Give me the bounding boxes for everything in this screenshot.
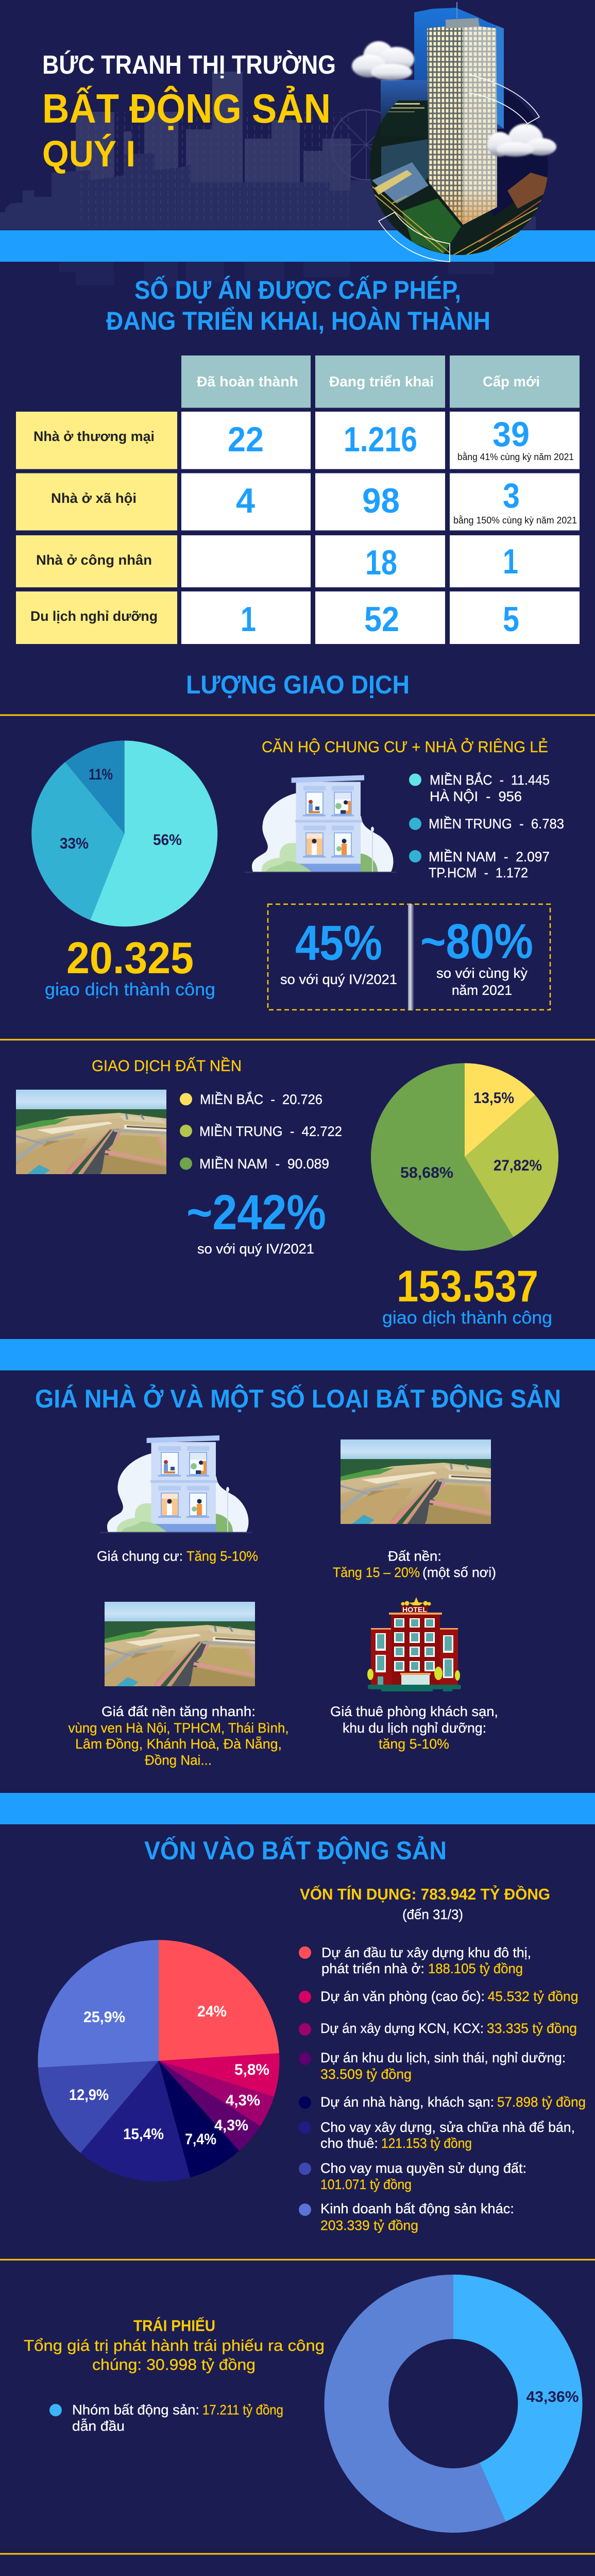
skyline reflection xyxy=(59,262,495,287)
text: land price regions: vùng ven Hà Nội, TPHCM, Thái Bình, xyxy=(68,1720,288,1736)
white outline arcs xyxy=(379,75,539,262)
text: land price regions: Lâm Đồng, Khánh Hoà, Đà Nẵng, xyxy=(75,1736,282,1752)
title: QUÝ I xyxy=(42,134,135,175)
legend: apartments: MIỀN NAM - 2.097 xyxy=(429,849,550,865)
row: nhà ở xã hội: 3 xyxy=(503,476,520,515)
cloud right xyxy=(487,124,556,157)
pie chart: credit: 5,8% xyxy=(234,2061,269,2078)
callout: comparison box: so với quý IV/2021 xyxy=(280,972,397,987)
title: BỨC TRANH THỊ TRƯỜNG xyxy=(42,50,336,79)
table header: Đang triển khai xyxy=(329,374,434,389)
row: du lịch nghỉ dưỡng: 1 xyxy=(241,600,256,639)
text: apartment price: Tăng 5-10% xyxy=(186,1549,258,1564)
total land xyxy=(382,1262,552,1328)
heading: capital: VỐN VÀO BẤT ĐỘNG SẢN xyxy=(144,1836,447,1865)
legend: credit: 121.153 tỷ đồng xyxy=(381,2136,472,2151)
blue band xyxy=(0,1793,595,1824)
row: du lịch nghỉ dưỡng: Du lịch nghỉ dưỡng xyxy=(30,608,158,624)
pie chart: land by region: 58,68% xyxy=(400,1164,453,1181)
pie chart: land by region: 27,82% xyxy=(494,1157,542,1174)
legend: credit: cho thuê: xyxy=(320,2136,378,2151)
credit heading: VỐN TÍN DỤNG: 783.942 TỶ ĐỒNG xyxy=(300,1885,550,1903)
donut chart: bonds xyxy=(324,2275,582,2533)
heading: prices: GIÁ NHÀ Ở VÀ MỘT SỐ LOẠI BẤT ĐỘNG SẢN xyxy=(35,1384,561,1413)
legend: land: MIỀN TRUNG - 42.722 xyxy=(199,1123,342,1139)
pie chart: apartments by region xyxy=(31,740,217,927)
legend: credit: Cho vay mua quyền sử dụng đất: xyxy=(320,2161,526,2176)
legend: credit: 188.105 tỷ đồng xyxy=(428,1961,523,1976)
legend: credit: Dự án đầu tư xây dựng khu đô thị, xyxy=(321,1945,531,1960)
legend: credit: Dự án văn phòng (cao ốc): xyxy=(320,1989,485,2004)
pie chart: credit: 4,3% xyxy=(214,2117,248,2134)
legend: land: MIỀN BẮC - 20.726 xyxy=(200,1091,322,1107)
row: nhà ở thương mại: bằng 41% cùng kỳ năm 2021 xyxy=(457,451,574,462)
credit heading: (đến 31/3) xyxy=(402,1907,463,1922)
table header: Cấp mới xyxy=(483,374,540,389)
callout: comparison box: ~80% xyxy=(420,914,533,969)
row: nhà ở xã hội: Nhà ở xã hội xyxy=(51,490,137,506)
legend: credit: 57.898 tỷ đồng xyxy=(497,2094,586,2110)
row: nhà ở thương mại: 1.216 xyxy=(344,420,417,459)
row: nhà ở xã hội xyxy=(16,473,580,531)
table header xyxy=(181,355,580,408)
pie chart: credit: 25,9% xyxy=(83,2009,125,2026)
text: bonds: 17.211 tỷ đồng xyxy=(202,2402,283,2417)
pie chart: credit: 24% xyxy=(197,2003,227,2020)
heading: project counts: ĐANG TRIỂN KHAI, HOÀN THÀNH xyxy=(106,307,490,335)
row: du lịch nghỉ dưỡng xyxy=(16,591,580,644)
donut chart: bonds: 43,36% xyxy=(526,2388,579,2405)
legend: land xyxy=(180,1091,342,1172)
total apartments: 20.325 xyxy=(66,934,194,983)
callout: comparison box xyxy=(268,904,550,1010)
legend: land: MIỀN NAM - 90.089 xyxy=(199,1156,329,1172)
icon: hotel xyxy=(367,1597,461,1691)
text: land price: Tăng 15 – 20% xyxy=(333,1565,420,1580)
row: nhà ở công nhân: 18 xyxy=(365,543,397,582)
text: bonds: Nhóm bất động sản: xyxy=(72,2402,199,2417)
hero header xyxy=(0,2,595,287)
heading: project counts: SỐ DỰ ÁN ĐƯỢC CẤP PHÉP, xyxy=(134,275,461,304)
pie chart: apartments by region: 11% xyxy=(89,766,113,783)
legend: credit: Dự án xây dựng KCN, KCX: xyxy=(320,2021,484,2036)
row: nhà ở xã hội: bằng 150% cùng kỳ năm 2021 xyxy=(453,515,577,526)
pie chart: credit: 7,4% xyxy=(185,2131,216,2148)
text: land price xyxy=(333,1549,496,1580)
photo: land plots xyxy=(341,1439,491,1524)
photo: land plots xyxy=(16,1090,166,1174)
callout: comparison box: so với cùng kỳ xyxy=(436,965,528,981)
text: bonds: chúng: 30.998 tỷ đồng xyxy=(92,2355,256,2374)
row: du lịch nghỉ dưỡng: 52 xyxy=(364,600,399,639)
title xyxy=(42,50,336,175)
icon: apartment building xyxy=(245,775,397,873)
text: apartment price xyxy=(97,1549,258,1564)
row: nhà ở thương mại: Nhà ở thương mại xyxy=(33,429,155,444)
callout: comparison box: năm 2021 xyxy=(452,982,512,998)
blue band xyxy=(0,230,595,262)
tower image xyxy=(352,2,556,262)
pie chart: apartments by region: 33% xyxy=(60,835,89,852)
text: land price regions: Đồng Nai... xyxy=(145,1753,212,1768)
row: nhà ở công nhân xyxy=(16,535,580,587)
legend: apartments: MIỀN TRUNG - 6.783 xyxy=(429,816,564,832)
blue band xyxy=(0,1339,595,1370)
title: BẤT ĐỘNG SẢN xyxy=(42,86,331,131)
row: du lịch nghỉ dưỡng: 5 xyxy=(503,600,519,639)
text: land price: Đất nền: xyxy=(388,1549,441,1564)
text: bonds: Tổng giá trị phát hành trái phiếu ra công xyxy=(24,2336,325,2354)
heading: project counts xyxy=(106,275,490,335)
text: bonds xyxy=(24,2316,325,2434)
land heading: GIAO DỊCH ĐẤT NỀN xyxy=(92,1057,242,1075)
text: bonds: TRÁI PHIẾU xyxy=(133,2316,215,2335)
legend: credit: Kinh doanh bất động sản khác: xyxy=(320,2201,514,2216)
legend: credit: phát triển nhà ở: xyxy=(321,1961,424,1976)
legend: credit: 45.532 tỷ đồng xyxy=(487,1989,578,2004)
pie chart: credit: 12,9% xyxy=(69,2087,109,2104)
row: nhà ở công nhân: Nhà ở công nhân xyxy=(36,552,152,568)
text: apartment price: Giá chung cư: xyxy=(97,1549,183,1564)
row: nhà ở thương mại: 39 xyxy=(492,415,530,454)
text: hotel prices: tăng 5-10% xyxy=(379,1736,449,1752)
pie chart: land by region: 13,5% xyxy=(473,1090,514,1107)
pie chart: apartments by region: 56% xyxy=(153,832,182,849)
callout: comparison box: 45% xyxy=(295,916,382,971)
legend: credit: 203.339 tỷ đồng xyxy=(320,2217,418,2233)
legend: apartments: TP.HCM - 1.172 xyxy=(429,865,528,880)
icon: hotel: HOTEL xyxy=(402,1605,427,1614)
legend: credit xyxy=(299,1945,586,2233)
legend: apartments xyxy=(409,772,564,880)
icon: apartment building xyxy=(100,1435,252,1533)
pie chart: credit: 15,4% xyxy=(123,2126,164,2143)
row: nhà ở thương mại xyxy=(16,412,580,469)
apartments heading: CĂN HỘ CHUNG CƯ + NHÀ Ở RIÊNG LẺ xyxy=(262,737,548,756)
table header: Đã hoàn thành xyxy=(197,374,298,389)
text: hotel prices xyxy=(330,1704,498,1752)
total land: giao dịch thành công xyxy=(382,1308,552,1328)
legend: credit: 101.071 tỷ đồng xyxy=(320,2177,412,2192)
project table xyxy=(16,355,580,644)
legend: credit: 33.335 tỷ đồng xyxy=(487,2021,577,2036)
text: land price regions xyxy=(68,1704,288,1768)
text: land price regions: Giá đất nền tăng nhanh: xyxy=(101,1704,256,1719)
text: hotel prices: Giá thuê phòng khách sạn, xyxy=(330,1704,498,1719)
legend: apartments: MIỀN BẮC - 11.445 xyxy=(430,772,550,788)
callout: land growth: ~242% xyxy=(186,1185,326,1240)
legend: apartments: HÀ NỘI - 956 xyxy=(430,788,522,804)
legend: credit: 33.509 tỷ đồng xyxy=(320,2066,412,2082)
callout: land growth: so với quý IV/2021 xyxy=(197,1241,314,1257)
pie chart: credit xyxy=(38,1940,279,2182)
photo: land plots xyxy=(105,1602,255,1686)
total land: 153.537 xyxy=(397,1262,538,1311)
credit heading xyxy=(300,1885,550,1922)
legend: credit: Dự án nhà hàng, khách sạn: xyxy=(320,2094,494,2110)
cloud left xyxy=(352,41,414,80)
text: hotel prices: khu du lịch nghỉ dưỡng: xyxy=(343,1720,486,1736)
pie chart: land by region xyxy=(371,1063,558,1251)
heading: lượng giao dịch: LƯỢNG GIAO DỊCH xyxy=(186,670,410,699)
total apartments: giao dịch thành công xyxy=(45,980,215,999)
city skyline silhouette xyxy=(0,72,536,230)
pie chart: credit: 4,3% xyxy=(226,2092,260,2109)
text: land price: (một số nơi) xyxy=(422,1565,496,1580)
row: nhà ở xã hội: 98 xyxy=(362,481,400,520)
row: nhà ở thương mại: 22 xyxy=(228,420,264,459)
total apartments xyxy=(45,934,215,999)
row: nhà ở công nhân: 1 xyxy=(503,542,518,581)
row: nhà ở xã hội: 4 xyxy=(236,481,255,520)
legend: credit: Cho vay xây dựng, sửa chữa nhà để bán, xyxy=(320,2120,575,2135)
text: bonds: dẫn đầu xyxy=(72,2418,125,2434)
legend: credit: Dự án khu du lịch, sinh thái, nghỉ dưỡng: xyxy=(320,2050,566,2065)
